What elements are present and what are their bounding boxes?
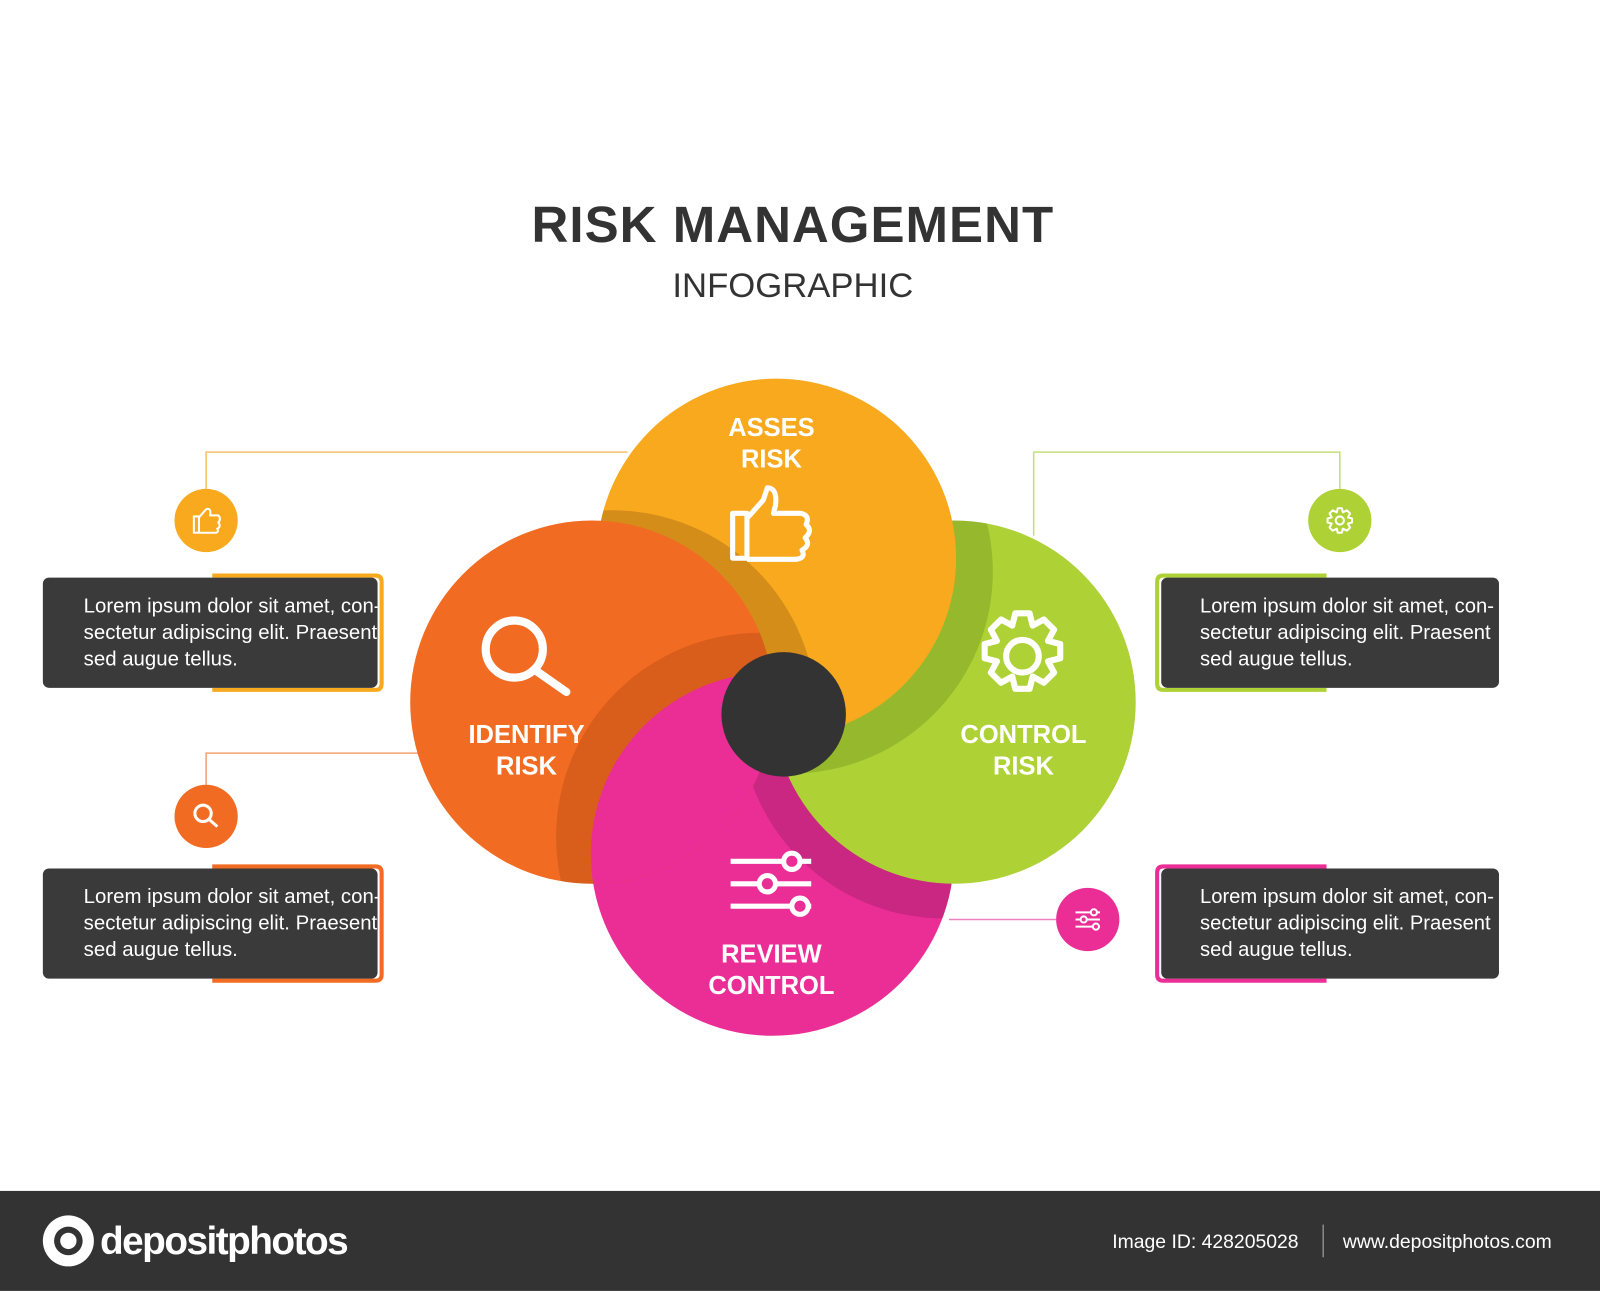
text box: bottom left: Lorem ipsum dolor sit amet, con-: [84, 886, 381, 908]
subtitle: INFOGRAPHIC: [672, 267, 913, 305]
text box: top right: sed augue tellus.: [1200, 648, 1353, 670]
venn diagram: RISK: [741, 445, 802, 473]
text box: bottom left: sed augue tellus.: [84, 939, 238, 961]
text box: top left: Lorem ipsum dolor sit amet, con-: [84, 595, 381, 617]
text box: bottom right: sectetur adipiscing elit. Praesent: [1200, 913, 1491, 935]
text box: bottom right: sed augue tellus.: [1200, 939, 1353, 961]
icon: sliders: [731, 853, 811, 914]
text box: top left: sectetur adipiscing elit. Praesent: [84, 622, 378, 644]
icon badge: gear: [1308, 489, 1371, 552]
icon badge: magnifier: [174, 785, 238, 848]
footer bar: [0, 1191, 1600, 1291]
label: asses risk: ASSES: [728, 414, 815, 442]
label: review control: REVIEW: [721, 940, 823, 968]
venn diagram: [408, 369, 1148, 1041]
text box: top right: [1157, 576, 1499, 690]
footer logo: depositphotos: [100, 1220, 347, 1263]
label: identify risk: IDENTIFY: [468, 721, 585, 749]
text box: bottom right: [1157, 866, 1499, 981]
text box: top left: [43, 576, 382, 690]
icon: magnifier: [486, 620, 566, 692]
footer logo: [43, 1215, 347, 1266]
title: RISK MANAGEMENT: [532, 196, 1054, 253]
text box: top right: sectetur adipiscing elit. Praesent: [1200, 622, 1491, 644]
icon: thumbs up: [733, 488, 809, 559]
venn diagram: RISK: [496, 753, 558, 781]
icon badge: sliders: [1056, 888, 1119, 951]
footer url: www.depositphotos.com: [1342, 1231, 1552, 1253]
label: control risk: CONTROL: [960, 721, 1087, 749]
icon badge: thumbs up: [174, 489, 238, 552]
text box: top right: Lorem ipsum dolor sit amet, con-: [1200, 595, 1494, 617]
text box: bottom left: [43, 866, 382, 981]
text box: bottom left: sectetur adipiscing elit. Praesent: [84, 913, 378, 935]
icon: gear: [985, 613, 1060, 689]
footer image id: Image ID: 428205028: [1112, 1231, 1299, 1253]
text box: bottom right: Lorem ipsum dolor sit amet, con-: [1200, 886, 1494, 908]
title: [532, 196, 1054, 305]
text box: top left: sed augue tellus.: [84, 648, 238, 670]
center circle: [721, 652, 846, 777]
connector lines: [206, 452, 1340, 919]
venn diagram: CONTROL: [708, 972, 834, 1000]
venn diagram: RISK: [993, 753, 1055, 781]
